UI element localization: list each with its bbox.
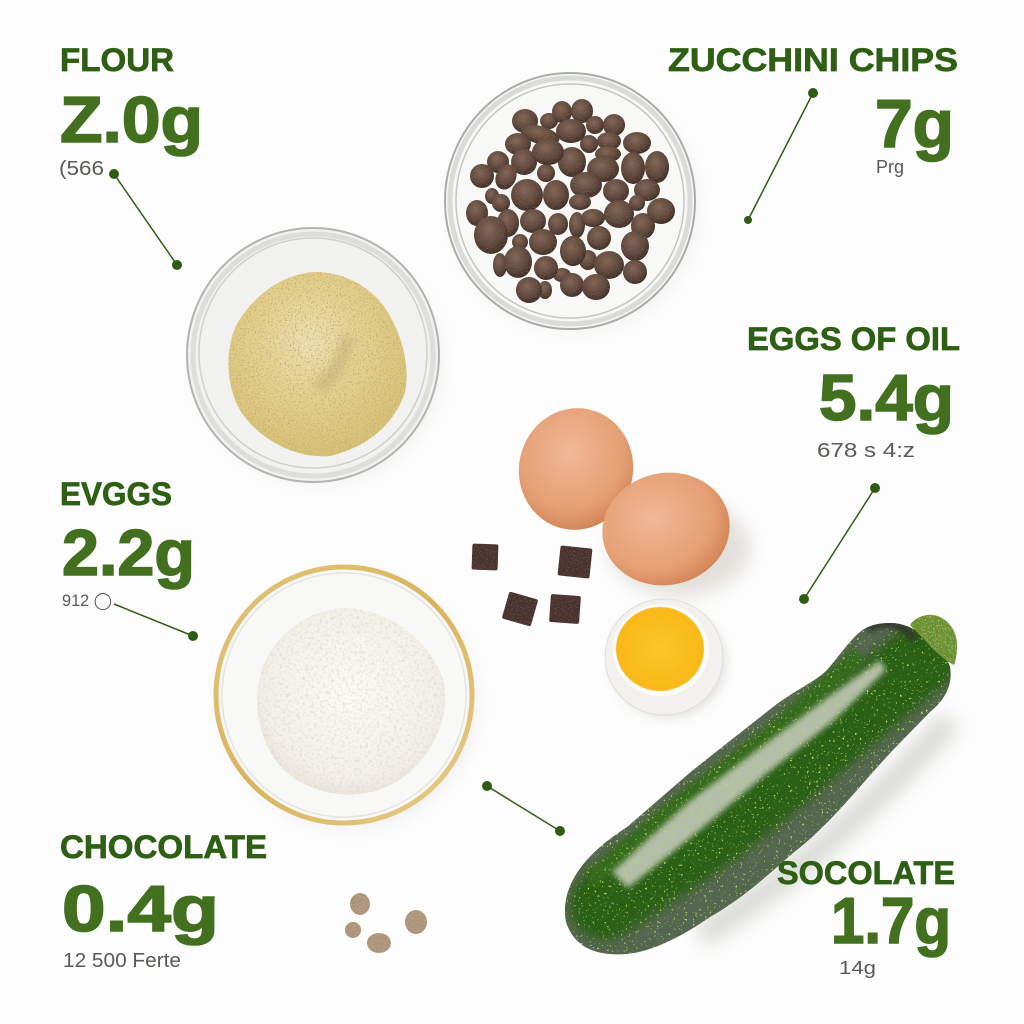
label: chocolate: 12 500 Ferte: [63, 950, 181, 972]
egg: right: [592, 461, 740, 597]
label: evggs: [60, 476, 195, 611]
label: socolate: 1.7g: [831, 884, 951, 957]
flour crease: [318, 336, 348, 388]
yellow flour mound: [228, 272, 407, 456]
label: eggs of oil: 678 s 4:z: [817, 440, 915, 462]
zucchini stem: [910, 615, 957, 665]
label: chocolate: 0.4g: [62, 872, 219, 945]
pointer: zucchini chips: [744, 88, 818, 224]
label: zucchini chips: 7g: [875, 86, 954, 162]
bowl: chocolate chips: [445, 73, 698, 330]
label: zucchini chips: [668, 42, 958, 177]
label: socolate: 14g: [839, 958, 876, 978]
bowl: white flour: [216, 567, 476, 828]
chocolate chips pile: [466, 99, 675, 303]
label: zucchini chips: ZUCCHINI CHIPS: [668, 42, 958, 78]
label: evggs: 912 ◯: [62, 591, 112, 611]
yolk: [616, 607, 704, 691]
label: evggs: EVGGS: [60, 476, 172, 512]
label: chocolate: CHOCOLATE: [60, 829, 267, 865]
pointer: flour: [109, 169, 182, 270]
label: eggs of oil: 5.4g: [819, 361, 954, 434]
zucchini: [564, 614, 961, 954]
label: zucchini chips: Prg: [876, 157, 904, 177]
label: flour: FLOUR: [60, 42, 174, 78]
label: chocolate: [60, 829, 267, 972]
label: evggs: 2.2g: [62, 516, 195, 589]
zucchini body: [564, 623, 951, 954]
label: eggs of oil: [747, 321, 960, 462]
label: socolate: [777, 855, 955, 978]
chocolate squares: [472, 544, 592, 627]
label: eggs of oil: EGGS OF OIL: [747, 321, 960, 357]
pointer: eggs of oil: [799, 483, 880, 604]
egg: left: [508, 397, 644, 541]
label: flour: Z.0g: [60, 83, 203, 156]
label: flour: (566: [59, 158, 104, 180]
bowl: yellow flour: [187, 228, 442, 482]
pointer: chocolate: [482, 781, 565, 836]
label: socolate: SOCOLATE: [777, 855, 955, 891]
eggs: [508, 397, 750, 597]
pointer: evggs: [114, 604, 198, 641]
label: flour: [59, 42, 203, 180]
small nuts: [345, 893, 427, 953]
small bowl with egg yolk: [605, 599, 726, 718]
white flour mound: [257, 608, 445, 795]
